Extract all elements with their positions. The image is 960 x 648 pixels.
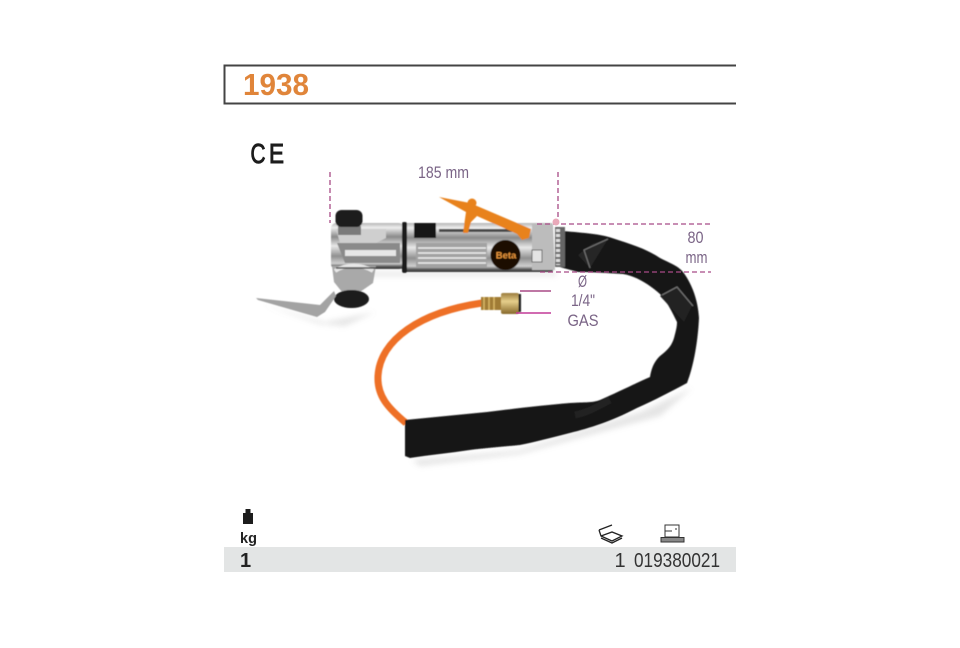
header bar with product code xyxy=(224,66,736,104)
thread size: 1/4" xyxy=(571,292,595,310)
CE mark: C xyxy=(250,138,266,169)
icon: orange air hose xyxy=(378,303,482,423)
height unit: mm xyxy=(686,249,708,267)
height label: 80 xyxy=(688,229,704,247)
icon: tool body xyxy=(331,222,565,292)
dimension labels xyxy=(418,164,708,330)
length label: 185 mm xyxy=(418,164,469,182)
weight unit: kg xyxy=(240,531,257,547)
data row xyxy=(224,547,736,572)
icon: barcode terminal xyxy=(661,525,684,542)
icon: Beta logo: Beta xyxy=(496,250,517,262)
dimension lines xyxy=(330,172,711,313)
icon: lower knob xyxy=(334,290,369,308)
order code: 019380021 xyxy=(634,550,720,572)
soft shadows xyxy=(262,272,692,466)
icon: black exhaust sleeve xyxy=(405,228,699,458)
icon: blade xyxy=(256,291,336,317)
diameter symbol: Ø xyxy=(578,273,587,291)
icon: brass fitting xyxy=(481,293,521,314)
icon: top knob xyxy=(336,210,362,235)
weight value: 1 xyxy=(240,550,251,572)
CE mark xyxy=(250,138,284,169)
air tool product illustration xyxy=(256,197,699,466)
thread type: GAS xyxy=(568,312,598,330)
icon: Beta logo xyxy=(490,240,520,270)
icon: orange trigger lever xyxy=(439,197,531,240)
CE mark: E xyxy=(269,138,284,169)
icon: weight xyxy=(243,509,253,524)
dimension marker xyxy=(552,218,560,226)
icon: package box xyxy=(599,525,622,543)
product code: 1938 xyxy=(243,67,309,102)
package quantity: 1 xyxy=(614,550,626,572)
